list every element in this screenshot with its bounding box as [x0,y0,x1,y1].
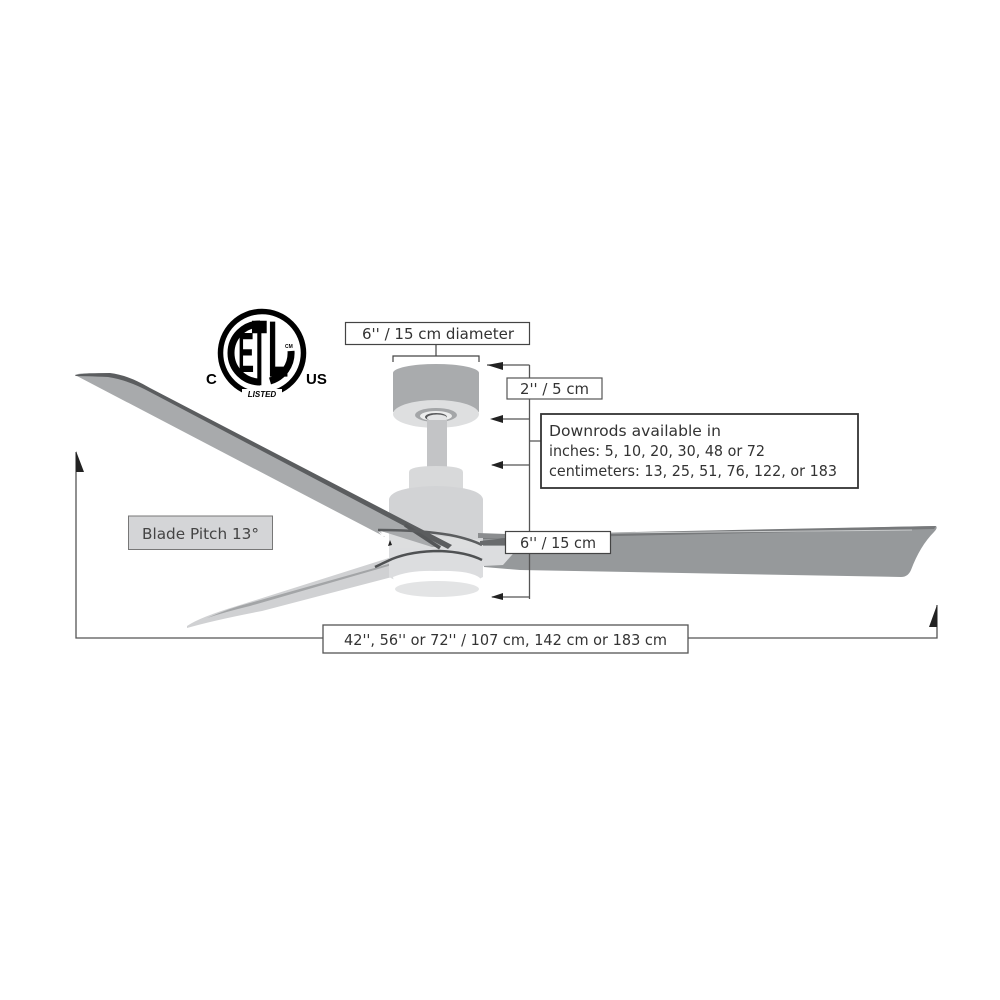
canopy [393,364,479,428]
dimension line with arrows [487,362,541,600]
label: canopy diameter: 6'' / 15 cm diameter [362,325,515,343]
blade: lower left [187,557,392,628]
fan span dimension line [76,451,937,638]
label: motor height: 6'' / 15 cm [520,534,596,552]
motor bands and hub details [375,530,506,567]
callout: downrods [541,414,858,488]
label: canopy diameter [346,322,530,344]
label: blade pitch [128,516,272,550]
callout: downrods: centimeters: 13, 25, 51, 76, 122, or 183 [549,462,837,480]
icon: ETL listed mark: T [252,302,267,403]
label: motor height [506,532,610,554]
label: fan span [323,625,688,653]
icon: ETL listed mark [206,302,327,403]
bracket: canopy diameter [393,345,479,362]
blade: right [480,526,937,577]
icon: ETL listed mark: US [306,371,327,388]
downrod [427,420,447,468]
motor housing [389,466,483,597]
icon: ETL listed mark: C [206,371,217,388]
blade: upper left [75,373,452,549]
icon: ETL listed mark: LISTED [248,390,276,399]
label: canopy height: 2'' / 5 cm [520,380,589,398]
label: canopy height [507,378,602,399]
callout: downrods: Downrods available in [549,422,721,440]
icon: ETL listed mark: E [238,321,254,385]
icon: ETL listed mark: CM [285,344,293,350]
icon: ETL listed mark: L [268,306,288,393]
label: blade pitch: Blade Pitch 13° [142,525,259,543]
callout: downrods: inches: 5, 10, 20, 30, 48 or 72 [549,442,765,460]
label: fan span: 42'', 56'' or 72'' / 107 cm, 142 cm or 183 cm [344,631,667,649]
